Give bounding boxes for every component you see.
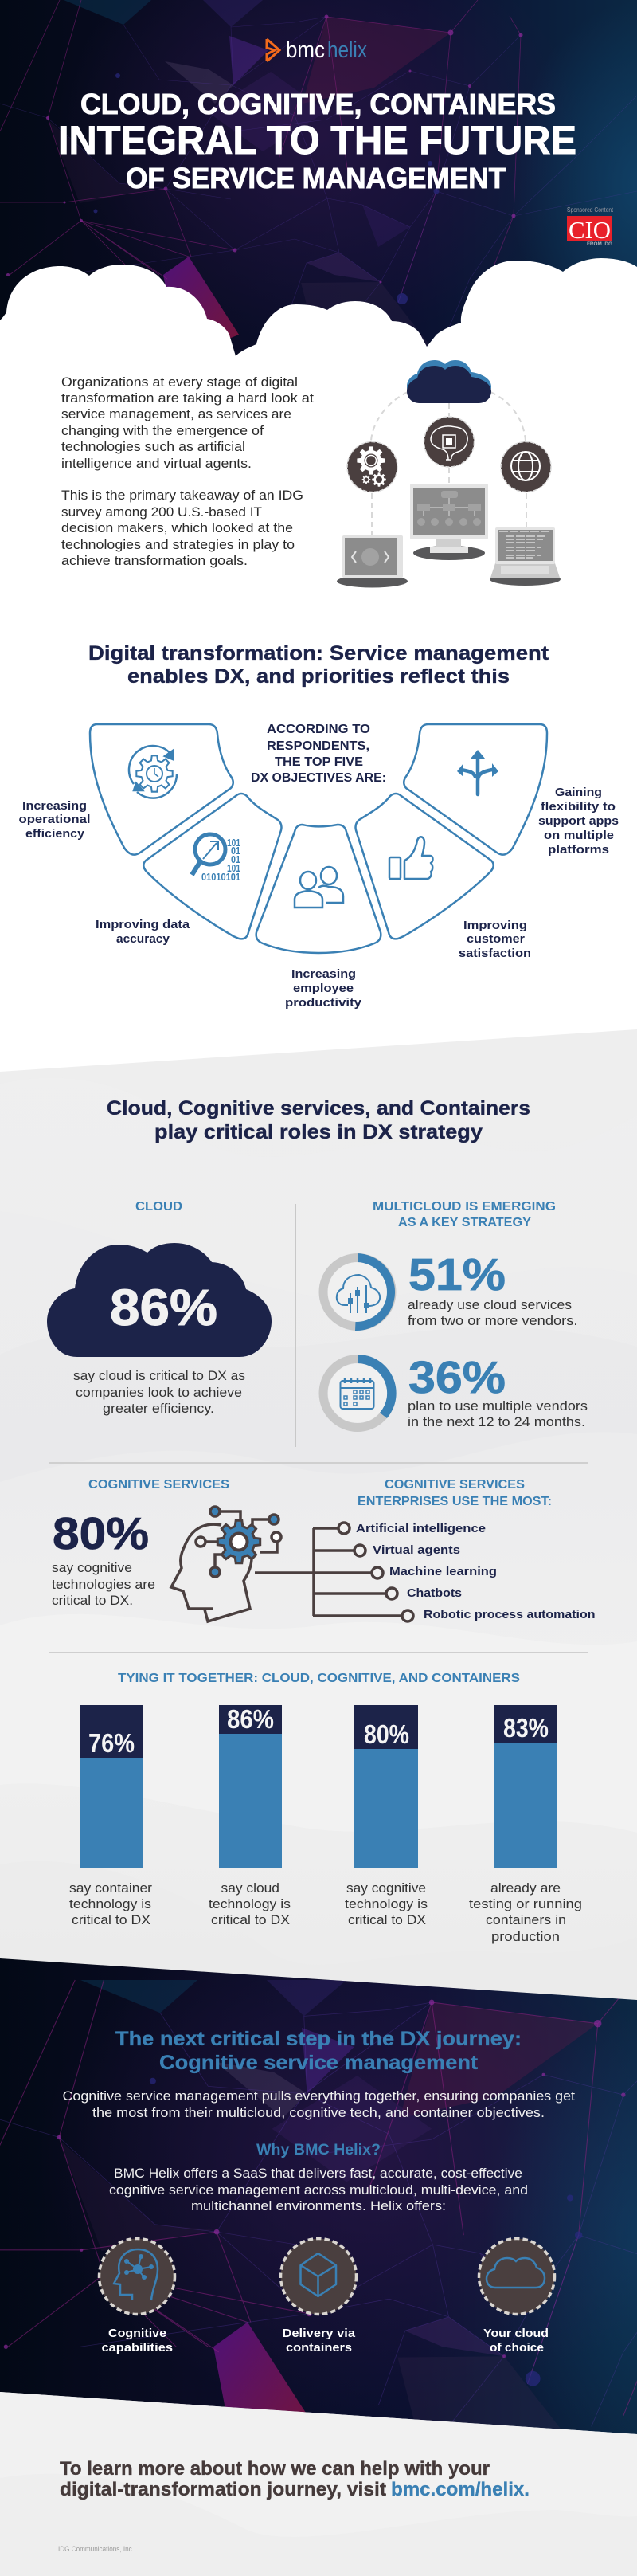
text: bar captions: say cognitive [346, 1881, 426, 1896]
labels: objectives: Increasing [291, 968, 356, 981]
copyright: IDG Communications, Inc. [58, 2545, 134, 2553]
panel: cloud statistic [47, 1200, 272, 1416]
text: bar captions: say cloud [221, 1881, 279, 1896]
stat: 51%: 51% [408, 1249, 506, 1300]
text: according to respondents: RESPONDENTS, [267, 739, 369, 753]
icon: magnifier with binary: 01010101 [201, 871, 240, 883]
icon: delivery via containers [280, 2239, 357, 2314]
heading: cloud: CLOUD [135, 1200, 182, 1214]
text block: introduction: changing with the emergence of [61, 424, 264, 438]
diagram: branch connectors [255, 1523, 413, 1621]
labels: objectives: operational [19, 814, 90, 826]
label: your cloud of choice [483, 2327, 549, 2354]
heading: cognitive services: COGNITIVE SERVICES [88, 1478, 229, 1492]
icon: magnifier with binary [192, 834, 240, 883]
icon: cognitive capabilities [99, 2239, 175, 2314]
icon: magnifier with binary: 101 [227, 837, 240, 849]
labels: objectives: Increasing [22, 800, 87, 813]
labels: objectives: Improving data [96, 919, 190, 931]
text block: introduction [61, 375, 314, 568]
segment: increasing operational efficiency [90, 724, 233, 855]
logo: CIO sponsored content: CIO [569, 216, 611, 244]
call to action: To learn more about how we can help with your [60, 2458, 490, 2480]
text: helix offers: BMC Helix offers a SaaS that delivers fast, accurate, cost-effective [114, 2166, 522, 2181]
text: cognitive service management: the most from their multicloud, cognitive tech, and container objectives. [92, 2106, 545, 2120]
text: cloud caption: say cloud is critical to DX as [73, 1369, 245, 1383]
icon: tablet [337, 535, 408, 588]
text: bar captions: technology is [209, 1897, 291, 1911]
text: bar captions: already are [490, 1881, 561, 1896]
heading: services enterprises use most: COGNITIVE SERVICES [385, 1478, 525, 1492]
labels: objectives: platforms [548, 844, 609, 857]
text: bar captions: critical to DX [72, 1913, 150, 1927]
text: helix offers: cognitive service management across multicloud, multi-device, and [109, 2183, 528, 2198]
logo: CIO sponsored content [567, 206, 614, 247]
chart: five objective segments [90, 724, 547, 953]
call to action [60, 2458, 530, 2500]
panel: dark section text [62, 2028, 575, 2213]
bar: 83% [494, 1705, 557, 1868]
text: bar captions: production [491, 1930, 560, 1944]
call to action: digital-transformation journey, visit [60, 2479, 386, 2500]
heading: services enterprises use most: ENTERPRISES USE THE MOST: [358, 1495, 552, 1508]
text: 80% caption: critical to DX. [52, 1594, 133, 1608]
bar: 80%: 80% [364, 1719, 409, 1749]
list: cognitive services: Chatbots [407, 1587, 462, 1600]
text: 80% caption: technologies are [52, 1578, 155, 1592]
heading: cloud cognitive containers: Cloud, Cognitive services, and Containers [107, 1097, 530, 1119]
text: cognitive service management [62, 2089, 575, 2120]
panel: dark cognitive service management [0, 1958, 637, 2434]
label: delivery via containers [282, 2327, 356, 2354]
panel: footer background [0, 2392, 637, 2576]
text: according to respondents: DX OBJECTIVES ARE: [251, 771, 386, 785]
icon: magnifier with binary: 01 [231, 845, 240, 857]
text: bar captions: critical to DX [211, 1913, 290, 1927]
text block: introduction: achieve transformation goals. [61, 554, 248, 568]
text: 51% caption: already use cloud services [408, 1298, 572, 1312]
heading: cloud cognitive containers: play critical roles in DX strategy [154, 1121, 483, 1143]
icon: globe circle [501, 441, 551, 492]
label: cognitive capabilities: capabilities [102, 2341, 173, 2354]
icon: your cloud of choice [479, 2239, 554, 2314]
text: bar captions: say container [69, 1881, 153, 1896]
text: cognitive service management: Cognitive service management pulls everything together, ensuring companies get [62, 2089, 575, 2104]
list: cognitive services: Machine learning [389, 1566, 497, 1578]
heading: next critical step [115, 2028, 522, 2074]
text block: introduction: transformation are taking a hard look at [61, 391, 314, 406]
bar: 76%: 76% [88, 1728, 135, 1758]
bar: 76% [80, 1705, 143, 1868]
heading: digital transformation: enables DX, and priorities reflect this [127, 665, 510, 688]
heading: multicloud [373, 1200, 556, 1229]
labels: objectives: flexibility to [541, 801, 616, 814]
bar: 83%: 83% [503, 1713, 549, 1743]
text: bar captions: testing or running [469, 1897, 582, 1911]
icon: magnifier with binary: 101 [227, 862, 240, 874]
label: cognitive capabilities: Cognitive [108, 2327, 166, 2340]
call to action: bmc.com/helix. [391, 2479, 530, 2500]
text: bar captions: technology is [69, 1897, 151, 1911]
labels: objectives: Improving [463, 919, 527, 932]
labels: objectives: employee [293, 982, 354, 995]
text block: introduction: Organizations at every stage of digital [61, 375, 298, 390]
label: your cloud of choice: of choice [490, 2341, 544, 2354]
icon: big cloud [47, 1243, 272, 1357]
chart: donut 51% [323, 1253, 395, 1331]
heading: tying it together: TYING IT TOGETHER: CLOUD, COGNITIVE, AND CONTAINERS [118, 1672, 520, 1685]
logo: bmc helix [267, 37, 367, 63]
heading: digital transformation: Digital transformation: Service management [88, 642, 549, 665]
text: helix offers [109, 2166, 528, 2213]
text: bar captions: technology is [345, 1897, 428, 1911]
labels: objectives: customer [467, 933, 525, 946]
text: bar captions: critical to DX [348, 1913, 426, 1927]
bar: 86%: 86% [227, 1704, 274, 1734]
panel: cognitive services [52, 1478, 596, 1621]
list: cognitive services: Virtual agents [373, 1544, 460, 1557]
text: 51% caption [408, 1298, 578, 1328]
labels: objectives: efficiency [25, 828, 84, 841]
labels: objectives: support apps [538, 815, 619, 828]
text: 51% caption: from two or more vendors. [408, 1314, 578, 1328]
text: according to respondents: ACCORDING TO [267, 723, 370, 736]
icon: head with gear [171, 1507, 281, 1621]
panel: multicloud [323, 1200, 588, 1429]
list: cognitive services: Robotic process automation [424, 1609, 596, 1621]
list: cognitive services [356, 1523, 596, 1621]
text: 36% caption: plan to use multiple vendors [408, 1399, 588, 1413]
heading: digital transformation [88, 642, 549, 688]
logo: bmc helix: bmc [286, 37, 325, 63]
logo: bmc helix: helix [327, 37, 367, 63]
icon: thumbs up [389, 837, 433, 879]
header clouds [0, 258, 637, 367]
segment: improving data accuracy [143, 794, 282, 939]
labels: objectives [19, 786, 619, 1010]
chart: stacked bars [80, 1704, 557, 1868]
text block: introduction: decision makers, which looked at the [61, 521, 293, 535]
stat: 86%: 86% [110, 1279, 217, 1336]
heading: cloud cognitive containers [107, 1097, 530, 1143]
icon: brain circle [424, 417, 475, 467]
text: helix offers: multichannel environments. Helix offers: [191, 2199, 446, 2213]
icon: magnifier with binary: 01 [231, 853, 240, 865]
illustration: cloud connected to devices [337, 360, 561, 588]
icon: gears circle [347, 441, 397, 492]
chart: donut 36% [323, 1355, 397, 1428]
logo: CIO sponsored content: Sponsored Content [567, 206, 614, 214]
heading: next critical step: The next critical step in the DX journey: [115, 2028, 522, 2050]
heading: why BMC Helix: Why BMC Helix? [256, 2142, 381, 2158]
label: your cloud of choice: Your cloud [483, 2327, 549, 2340]
icon: diverging arrows [457, 750, 498, 794]
text block: introduction: This is the primary takeaway of an IDG [61, 488, 303, 503]
labels: objectives: productivity [285, 997, 361, 1010]
heading: multicloud: AS A KEY STRATEGY [398, 1216, 532, 1229]
panel: header background [0, 0, 637, 367]
title: CLOUD, COGNITIVE, CONTAINERS [80, 88, 556, 120]
text block: introduction: technologies and strategies in play to [61, 538, 295, 552]
icon: laptop [490, 527, 561, 586]
labels: objectives: satisfaction [459, 947, 531, 960]
bar: 80% [354, 1705, 418, 1868]
title: INTEGRAL TO THE FUTURE [58, 118, 576, 163]
labels: objectives: accuracy [116, 933, 170, 946]
text: cloud caption: greater efficiency. [103, 1402, 214, 1416]
text: 80% caption [52, 1561, 155, 1608]
label: cognitive capabilities [102, 2327, 173, 2354]
labels: objectives: Gaining [555, 786, 602, 799]
text block: introduction: service management, as services are [61, 407, 291, 421]
text: cloud caption [73, 1369, 245, 1416]
label: delivery via containers: Delivery via [282, 2327, 356, 2340]
divider [295, 1204, 296, 1447]
text: 36% caption [408, 1399, 588, 1429]
text: cloud caption: companies look to achieve [76, 1386, 242, 1400]
labels: objectives: on multiple [544, 829, 614, 842]
text: 80% caption: say cognitive [52, 1561, 132, 1575]
bar: 86% [219, 1704, 282, 1868]
segment: gaining flexibility [404, 724, 547, 855]
icon: gear and clock [129, 746, 177, 798]
heading: multicloud: MULTICLOUD IS EMERGING [373, 1200, 556, 1214]
heading: services enterprises use most [358, 1478, 552, 1508]
label: delivery via containers: containers [286, 2341, 352, 2354]
text: bar captions [69, 1881, 582, 1944]
icon: cloud [407, 360, 491, 403]
panel: grey survey background [0, 1029, 637, 2016]
icon: two people [295, 867, 343, 908]
text block: introduction: technologies such as artificial [61, 440, 245, 454]
title [58, 88, 576, 194]
text: according to respondents: THE TOP FIVE [275, 755, 363, 769]
title: OF SERVICE MANAGEMENT [126, 162, 506, 194]
icon: desktop monitor [410, 484, 488, 560]
text: according to respondents [251, 723, 386, 785]
heading: next critical step: Cognitive service management [159, 2052, 479, 2074]
segment: improving customer satisfaction [355, 794, 494, 939]
stat: 36%: 36% [408, 1352, 506, 1403]
text: bar captions: containers in [486, 1913, 566, 1927]
text: 36% caption: in the next 12 to 24 months. [408, 1415, 585, 1429]
logo: CIO sponsored content: FROM IDG [587, 241, 612, 247]
segment: increasing employee productivity [256, 825, 381, 953]
text block: introduction: intelligence and virtual agents. [61, 457, 252, 471]
stat: 80%: 80% [53, 1508, 149, 1559]
text block: introduction: survey among 200 U.S.-based IT [61, 505, 262, 520]
list: cognitive services: Artificial intelligence [356, 1523, 486, 1535]
